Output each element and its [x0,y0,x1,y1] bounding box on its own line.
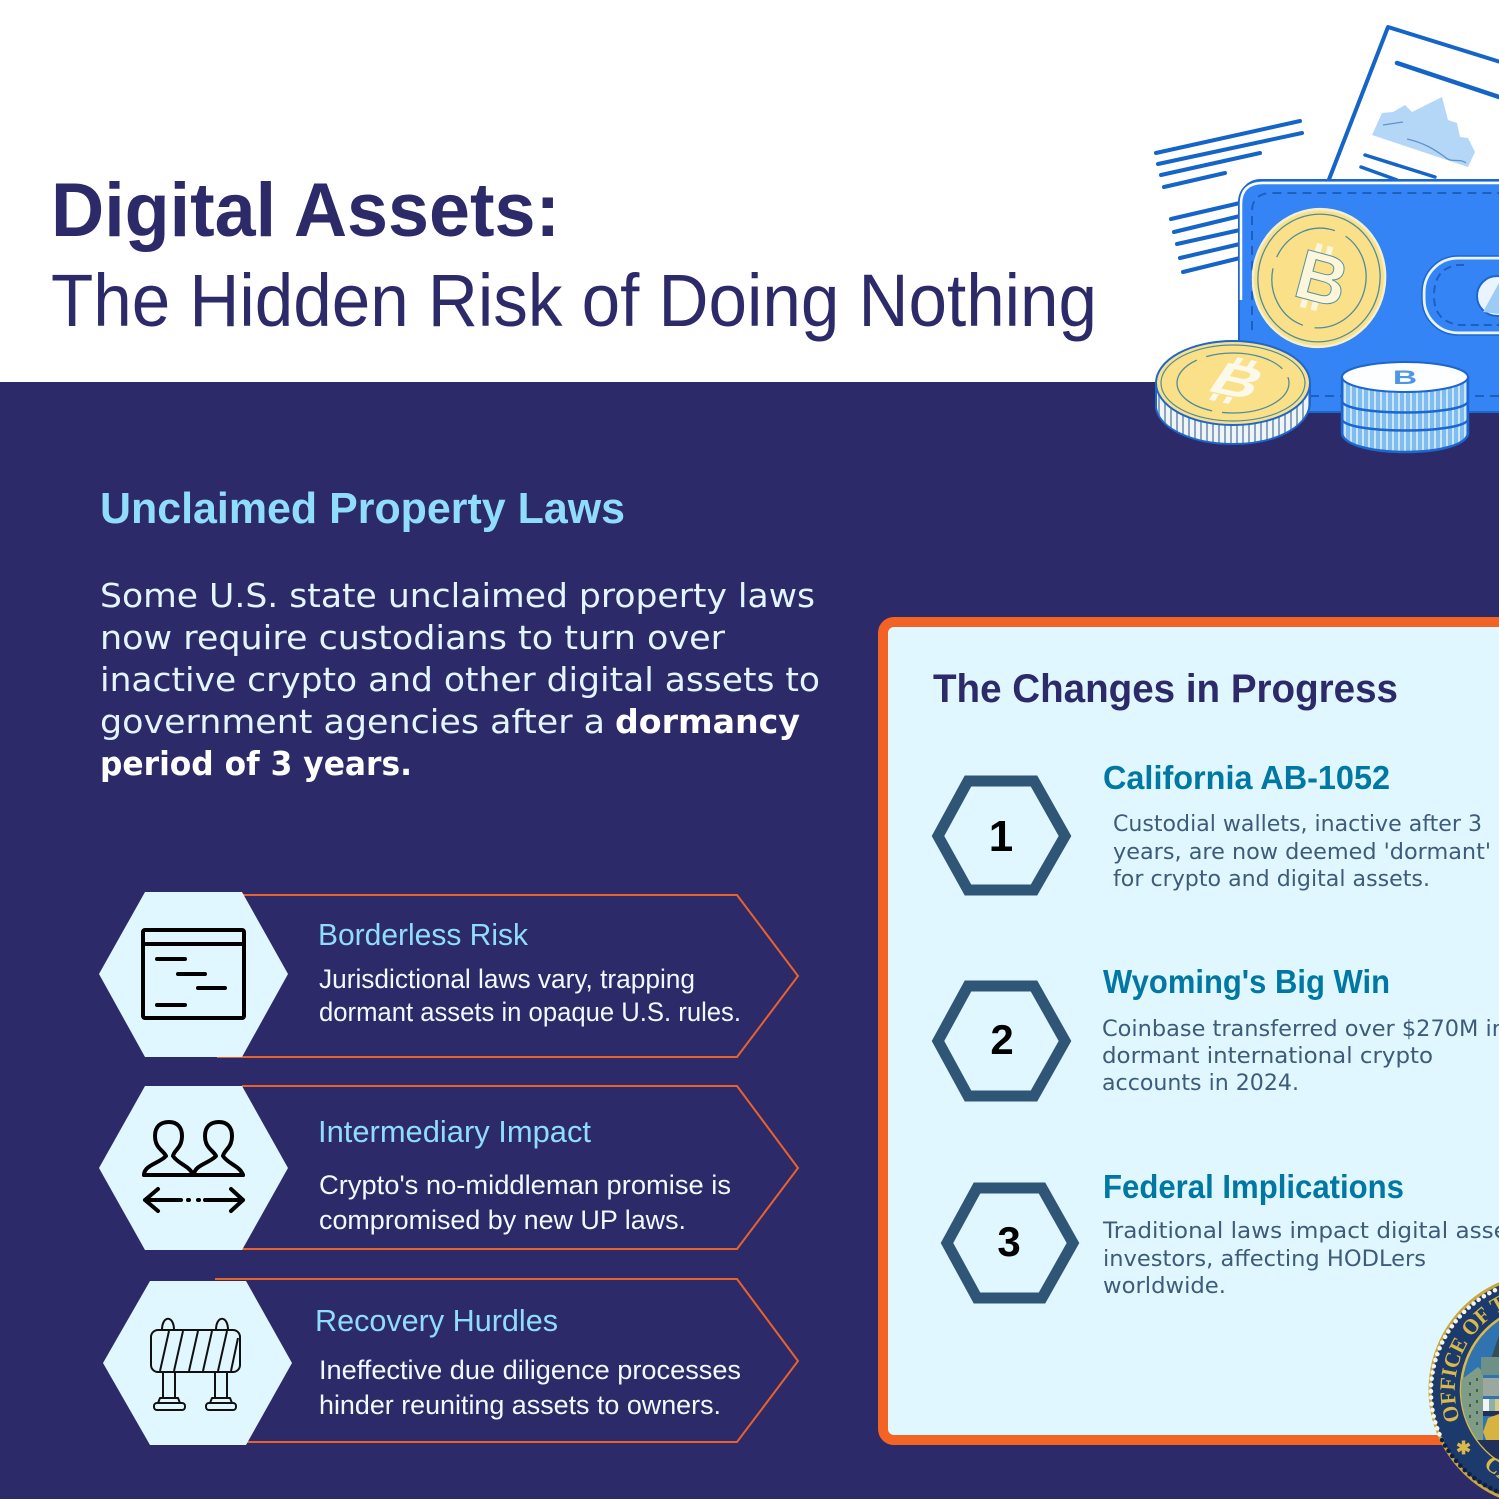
item text: dormant assets in opaque U.S. rules. [319,997,741,1027]
step heading: Federal Implications [1103,1168,1404,1205]
panel card [883,622,1499,1440]
hexagon number 3 [947,1188,1073,1298]
icon: blue coin stack: B [1393,366,1417,388]
step text [1102,1218,1499,1299]
icon: treasurer seal: ✱ [1456,1438,1471,1458]
title [51,168,1097,342]
hexagon number 1 [938,781,1065,890]
step text: accounts in 2024. [1102,1070,1299,1096]
text block: intro paragraph [100,576,820,783]
arrow outline [217,895,798,1057]
item text [319,1170,731,1235]
hexagon number 3: 3 [997,1218,1021,1265]
icon: two people with arrows [144,1122,243,1211]
step heading: Wyoming's Big Win [1103,963,1390,1000]
panel: borderless risk [99,892,798,1057]
item heading: Intermediary Impact [318,1114,591,1149]
icon: document with chart [1328,27,1499,182]
step text: for crypto and digital assets. [1113,866,1430,892]
title: Digital Assets: [51,168,560,253]
title: The Hidden Risk of Doing Nothing [51,259,1097,342]
step text [1102,1016,1499,1096]
item text: Ineffective due diligence processes [319,1355,741,1385]
step text: dormant international crypto [1102,1043,1433,1069]
item text: Crypto's no-middleman promise is [319,1170,731,1200]
item text: compromised by new UP laws. [319,1205,686,1235]
icon: large bitcoin coin: B [1287,234,1356,323]
icon: gold bitcoin coin lying flat: B [1199,354,1275,409]
item heading: Recovery Hurdles [315,1303,558,1338]
item text: hinder reuniting assets to owners. [319,1390,721,1420]
icon: wallet body [1239,180,1499,412]
step text: Custodial wallets, inactive after 3 [1113,811,1482,837]
icon: road barrier [151,1319,240,1410]
item text [319,964,741,1027]
icon hexagon [99,1086,288,1250]
item text [319,1355,741,1420]
step 2 [938,963,1499,1096]
step text: Coinbase transferred over $270M in [1102,1016,1499,1042]
text block: intro paragraph: Some U.S. state unclaimed property laws [100,576,815,615]
step text: investors, affecting HODLers [1103,1246,1426,1272]
arrow outline [215,1279,798,1442]
panel: recovery hurdles [103,1279,798,1445]
step text: worldwide. [1103,1273,1226,1299]
text block: intro paragraph: inactive crypto and other digital assets to [100,660,820,699]
step 3 [947,1168,1499,1299]
panel: the changes in progress [883,622,1499,1440]
icon hexagon [103,1281,292,1445]
hexagon number 2 [938,986,1065,1096]
icon: large bitcoin coin [1240,197,1398,359]
panel: intermediary impact [99,1086,798,1250]
heading: unclaimed property laws: Unclaimed Property Laws [100,484,625,533]
panel heading: The Changes in Progress [933,667,1398,711]
hexagon number 2: 2 [990,1016,1014,1063]
step heading: California AB-1052 [1103,759,1390,796]
item text: Jurisdictional laws vary, trapping [319,964,695,994]
text block: intro paragraph: period of 3 years. [100,744,412,783]
icon: blue coin stack [1342,362,1468,452]
step 1 [938,759,1491,892]
arrow outline [242,1086,798,1249]
text block: intro paragraph: dormancy [615,702,800,741]
text block: intro paragraph: now require custodians to turn over [100,618,725,657]
icon hexagon [99,892,288,1057]
icon: gold bitcoin coin lying flat [1156,341,1310,444]
illustration: wallet with coins [1156,27,1499,452]
icon: motion lines [1156,121,1302,272]
hexagon number 1: 1 [989,812,1013,861]
item heading: Borderless Risk [318,917,528,952]
step text: years, are now deemed 'dormant' [1113,839,1491,865]
icon: browser window [143,930,244,1018]
icon: treasurer seal [1428,1282,1499,1498]
step text [1113,811,1491,892]
text block: intro paragraph: government agencies after a [100,702,605,741]
